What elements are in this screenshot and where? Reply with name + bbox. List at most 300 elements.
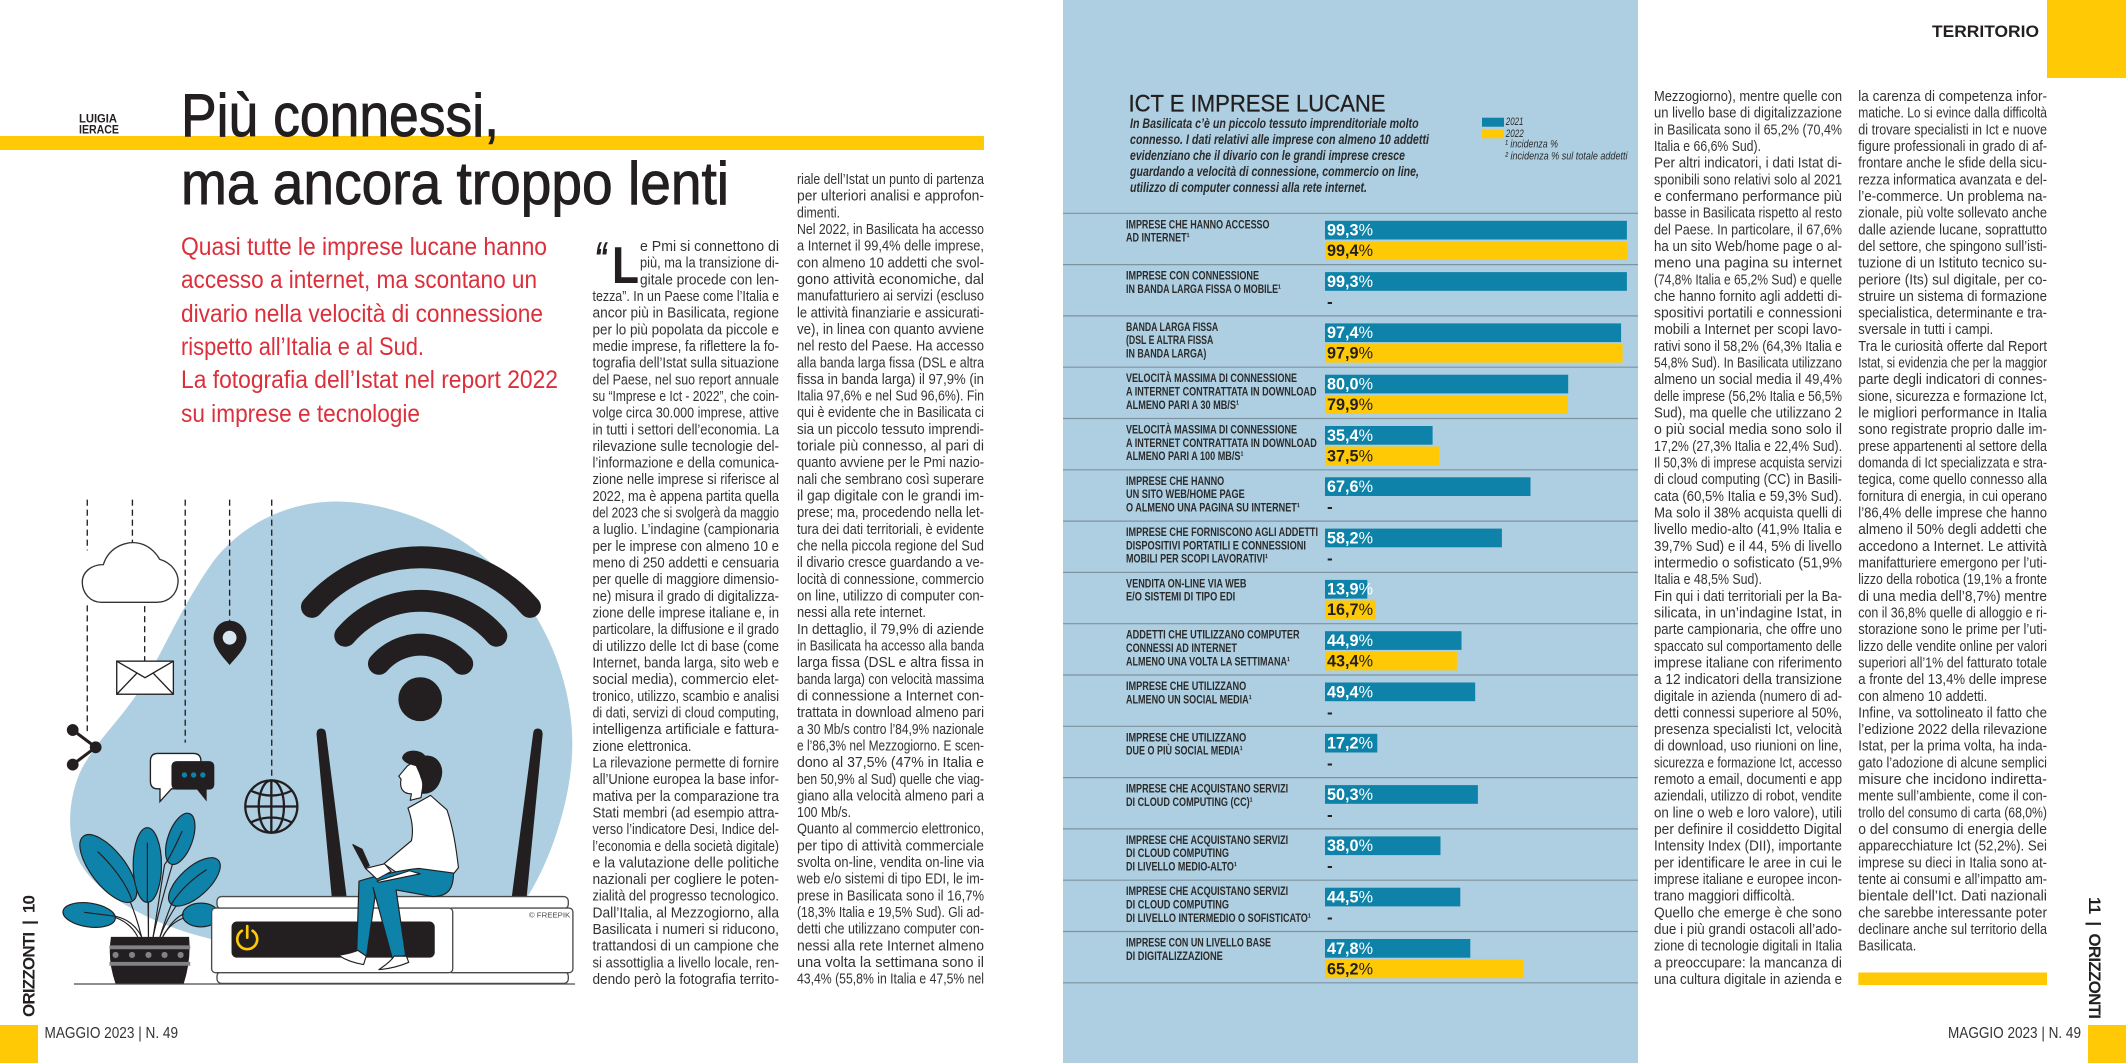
row: cloud computing: DI CLOUD COMPUTING (CC)¹ bbox=[1126, 795, 1253, 809]
row: velocita 30 mb/s: ALMENO PARI A 30 MB/S¹ bbox=[1126, 398, 1239, 412]
text column 3: spaccato sul comportamento delle bbox=[1654, 639, 1842, 655]
text column 1 bbox=[592, 239, 780, 988]
text column 4: rezza informatica avanzata e del- bbox=[1858, 172, 2047, 188]
text column 3: parte campionaria, che offre uno bbox=[1654, 622, 1842, 638]
row: cloud computing: 50,3% bbox=[1327, 785, 1373, 804]
row: cloud intermedio o sofisticato bbox=[1126, 884, 1460, 927]
text column 2: web e/o sistemi di tipo EDI, le im- bbox=[796, 872, 984, 888]
ground line bbox=[74, 983, 575, 985]
text column 2: per ulteriori analisi e approfon- bbox=[797, 189, 984, 205]
row: banda larga fissa: (DSL E ALTRA FISSA bbox=[1126, 333, 1214, 347]
icon: share bbox=[67, 724, 101, 770]
text column 1: e la valutazione delle politiche bbox=[592, 855, 779, 871]
text column 2: sia un piccolo tessuto imprendi- bbox=[797, 422, 984, 438]
row: livello base di digitalizzazione: 47,8% bbox=[1327, 939, 1373, 958]
text column 2: trattata in download almeno pari bbox=[797, 705, 984, 721]
text column 1: del Paese, nel suo report annuale bbox=[592, 372, 779, 388]
text column 4: zionale, più volte sollevato anche bbox=[1858, 206, 2047, 222]
row: addetti con computer: ALMENO UNA VOLTA LA SETTIMANA¹ bbox=[1126, 654, 1290, 668]
red subtitle bbox=[181, 233, 558, 428]
text column 2: le attività finanziarie e assicurati- bbox=[797, 305, 984, 321]
text column 2: dimenti. bbox=[797, 205, 840, 221]
row: velocita 30 mb/s: 80,0% bbox=[1327, 374, 1373, 394]
text column 1: ne) misura il grado di digitalizza- bbox=[592, 589, 779, 605]
row: banda larga fissa: BANDA LARGA FISSA bbox=[1126, 320, 1218, 334]
text column 3: (74,8% Italia e 65,2% Sud) e quelle bbox=[1654, 272, 1842, 288]
text column 4: tegica, come quello connesso alla bbox=[1858, 472, 2048, 488]
row: banda larga fissa: 97,9% bbox=[1327, 344, 1373, 363]
row: sito web: IMPRESE CHE HANNO bbox=[1126, 474, 1224, 488]
text column 4: almeno il 50% degli addetti che bbox=[1858, 522, 2047, 538]
legend: ¹ incidenza % bbox=[1505, 139, 1558, 151]
text column 1: intelligenza artificiale e fattura- bbox=[592, 722, 779, 738]
row: vendita on-line: E/O SISTEMI DI TIPO EDI bbox=[1126, 590, 1235, 604]
text column 1: di utilizzo delle Ict di base (come bbox=[592, 639, 779, 655]
text column 4: Tra le curiosità offerte dal Report bbox=[1858, 339, 2047, 355]
left issue line: MAGGIO 2023 | N. 49 bbox=[44, 1025, 178, 1042]
text column 3: Per altri indicatori, i dati Istat di- bbox=[1654, 156, 1842, 172]
drop cap: “ bbox=[594, 233, 608, 282]
text column 2: dono al 37,5% (47% in Italia e bbox=[797, 755, 984, 771]
text column 4: tente ai consumi e all’impatto am- bbox=[1858, 872, 2047, 888]
row: sito web bbox=[1126, 474, 1530, 517]
text column 2: larga fissa (DSL e altra fissa in bbox=[797, 655, 984, 671]
text column 3: detti connessi superiore al 50%, bbox=[1654, 705, 1842, 721]
text column 3: intermedio o sofisticato (51,9% bbox=[1654, 556, 1842, 572]
text column 3: rativi sono il 58,2% (64,3% Italia e bbox=[1654, 339, 1842, 355]
text column 4: bientale dell’Ict. Dati nazionali bbox=[1858, 889, 2047, 905]
text column 2: nel resto del Paese. Ha accesso bbox=[797, 339, 984, 355]
text column 1: La rilevazione permette di fornire bbox=[592, 756, 779, 772]
text column 4: l’86,4% delle imprese che hanno bbox=[1858, 506, 2047, 522]
text column 3: Italia e 48,5% Sud). bbox=[1654, 572, 1762, 588]
icon: wifi bbox=[312, 557, 530, 710]
row: un social media bbox=[1126, 679, 1475, 722]
row: un social media: IMPRESE CHE UTILIZZANO bbox=[1126, 679, 1246, 693]
text column 1: si assottiglia a livello locale, ren- bbox=[592, 955, 779, 971]
row: due social media: IMPRESE CHE UTILIZZANO bbox=[1126, 730, 1246, 744]
text column 3: imprese italiane e europee incon- bbox=[1654, 872, 1842, 888]
row: velocita 100 mb/s bbox=[1126, 422, 1439, 465]
text column 2: banda larga) con velocità massima bbox=[797, 672, 985, 688]
text column 4: di una media dell’8,7%) mentre bbox=[1858, 589, 2047, 605]
text column 4: Istat, per la prima volta, ha inda- bbox=[1858, 739, 2047, 755]
text column 3: delle imprese (56,2% Italia e 56,5% bbox=[1654, 389, 1842, 405]
row: vendita on-line: 16,7% bbox=[1327, 600, 1373, 619]
text column 3: digitale in azienda (numero di ad- bbox=[1654, 689, 1842, 705]
text column 1: verso l’indicatore Desi, Indice del- bbox=[592, 822, 779, 838]
text column 1: meno di 250 addetti e censuaria bbox=[592, 556, 780, 572]
text column 3: di cloud computing (CC) in Basili- bbox=[1654, 472, 1842, 488]
text column 1: dendo però la fotografia territo- bbox=[592, 972, 779, 988]
text column 3: on line o web e loro valore), utili bbox=[1654, 805, 1842, 821]
row: sito web: UN SITO WEB/HOME PAGE bbox=[1126, 487, 1245, 501]
text column 1: zialità del progresso tecnologico. bbox=[592, 889, 779, 905]
text column 3: e confermano performance più bbox=[1654, 189, 1842, 205]
row: livello base di digitalizzazione bbox=[1126, 936, 1523, 978]
text column 2: prese in Basilicata sono il 16,7% bbox=[797, 888, 984, 904]
text column 2: manufatturiero ai servizi (escluso bbox=[797, 289, 984, 305]
text column 1: su “Imprese e Ict - 2022”, che coin- bbox=[592, 389, 779, 405]
row: addetti con computer: CONNESSI AD INTERNET bbox=[1126, 641, 1237, 655]
text column 4: sono registrate proprio dalle im- bbox=[1858, 422, 2047, 438]
text column 3: Sud), ma quelle che utilizzano 2 bbox=[1654, 406, 1842, 422]
section heading: TERRITORIO bbox=[1932, 22, 2039, 41]
icon: cloud bbox=[82, 543, 178, 602]
text column 4: storazione sono le prime per l’uti- bbox=[1858, 622, 2047, 638]
text column 2: di connessione a Internet con- bbox=[797, 688, 984, 704]
row: banda larga fissa bbox=[1126, 320, 1623, 363]
legend: 2021 bbox=[1505, 116, 1523, 128]
text column 2: con almeno 10 addetti che svol- bbox=[797, 255, 984, 271]
row: livello base di digitalizzazione: DI DIGITALIZZAZIONE bbox=[1126, 949, 1223, 963]
text column 1: l’informazione e della comunica- bbox=[592, 456, 779, 472]
legend bbox=[1482, 116, 1628, 163]
text column 4: sversale in tutti i campi. bbox=[1858, 322, 1993, 338]
text column 3: aziendali, utilizzo di robot, vendite bbox=[1654, 789, 1842, 805]
text column 2: il divario cresce guardando a ve- bbox=[797, 555, 984, 571]
text column 2: a 30 Mb/s contro l’84,9% nazionale bbox=[797, 722, 984, 738]
text column 4: con il 36,8% quelle di alloggio e ri- bbox=[1858, 606, 2047, 622]
text column 2: fissa in banda larga) il 97,9% (in bbox=[797, 372, 984, 388]
row: un social media: 49,4% bbox=[1327, 682, 1373, 701]
text column 2: locità di connessione, commercio bbox=[797, 572, 984, 588]
text column 3: sponibili sono relativi solo al 2021 bbox=[1654, 172, 1842, 188]
text column 4: Istat, si evidenzia che per la maggior bbox=[1858, 356, 2047, 372]
text column 3: presenza specialisti Ict, velocità bbox=[1654, 722, 1843, 738]
text column 2: svolta on-line, vendita on-line via bbox=[797, 855, 985, 871]
text column 2: prese; ma, procedendo nella let- bbox=[797, 505, 984, 521]
icon: globe bbox=[245, 780, 297, 833]
text column 3: Il 50,3% di imprese acquista servizi bbox=[1654, 456, 1842, 472]
text column 3: imprese italiane con riferimento bbox=[1654, 655, 1842, 671]
text column 1: per quelle di maggiore dimensio- bbox=[592, 572, 779, 588]
row: accesso ad internet bbox=[1126, 217, 1627, 260]
text column 3: almeno un social media il 49,4% bbox=[1654, 372, 1842, 388]
row: sito web: O ALMENO UNA PAGINA SU INTERNET¹ bbox=[1126, 500, 1300, 514]
legend: 2022 bbox=[1505, 128, 1524, 140]
row: livello base di digitalizzazione: IMPRESE CON UN LIVELLO BASE bbox=[1126, 936, 1271, 950]
row: velocita 100 mb/s: VELOCITÀ MASSIMA DI CONNESSIONE bbox=[1126, 422, 1297, 436]
red subtitle: La fotografia dell’Istat nel report 2022 bbox=[181, 366, 558, 394]
text column 2: nessi alla rete Internet almeno bbox=[797, 938, 984, 954]
text column 3: un livello base di digitalizzazione bbox=[1654, 106, 1842, 122]
row: cloud intermedio o sofisticato: 44,5% bbox=[1327, 888, 1373, 906]
row: cloud medio-alto: 38,0% bbox=[1327, 836, 1373, 855]
row: cloud intermedio o sofisticato: DI LIVELLO INTERMEDIO O SOFISTICATO¹ bbox=[1126, 911, 1311, 925]
row: velocita 100 mb/s: ALMENO PARI A 100 MB/S¹ bbox=[1126, 449, 1244, 463]
row: velocita 100 mb/s: 35,4% bbox=[1327, 426, 1373, 445]
router antennas bbox=[316, 728, 543, 898]
text column 4: Infine, va sottolineato il fatto che bbox=[1858, 705, 2047, 721]
text column 2: ben 50,9% al Sud) quelle che viag- bbox=[797, 772, 984, 788]
text column 3: che hanno fornito agli addetti di- bbox=[1654, 289, 1842, 305]
text column 1: tezza”. In un Paese come l’Italia e bbox=[592, 289, 779, 305]
text column 4: sione, sicurezza e formazione Ict, bbox=[1858, 389, 2047, 405]
illustration: dashed lines bbox=[87, 500, 272, 779]
title: Più connessi, bbox=[181, 82, 499, 149]
red subtitle: accesso a internet, ma scontano un bbox=[181, 266, 537, 294]
text column 4: tuzione di un Istituto tecnico su- bbox=[1858, 256, 2047, 272]
row: dispositivi portatili bbox=[1126, 525, 1502, 568]
text column 1: Basilicata i numeri si riducono, bbox=[592, 922, 779, 938]
text column 3: del Paese. In particolare, il 67,6% bbox=[1654, 222, 1842, 238]
chart intro bbox=[1129, 116, 1429, 195]
text column 1: l’economia e della società digitale) bbox=[592, 839, 779, 855]
red subtitle: divario nella velocità di connessione bbox=[181, 300, 543, 328]
row: sito web: - bbox=[1327, 498, 1333, 517]
text column 3: mobili a Internet per scopi lavo- bbox=[1654, 322, 1842, 338]
top right square bbox=[2047, 0, 2126, 78]
text column 2: qui è evidente che in Basilicata ci bbox=[797, 405, 984, 421]
text column 2: nessi alla rete internet. bbox=[797, 605, 926, 621]
text column 3: silicata, in un’indagine Istat, in bbox=[1654, 606, 1842, 622]
text column 4: con almeno 10 addetti. bbox=[1858, 689, 1987, 705]
text column 1: volge circa 30.000 imprese, attive bbox=[592, 406, 779, 422]
text column 3: di download, uso riunioni on line, bbox=[1654, 739, 1842, 755]
text column 2: tura dei dati territoriali, è evidente bbox=[797, 522, 984, 538]
text column 1: zione nelle imprese si riferisce al bbox=[592, 472, 779, 488]
text column 1: 2022, ma è appena partita quella bbox=[592, 489, 780, 505]
byline bbox=[79, 112, 119, 136]
text column 3: Ma solo il 38% acquista quelli di bbox=[1654, 506, 1842, 522]
text column 4: lizzo della robotica (19,1% a fronte bbox=[1858, 572, 2047, 588]
row: banda larga fissa o mobile: IN BANDA LARGA FISSA O MOBILE¹ bbox=[1126, 282, 1281, 296]
row: velocita 30 mb/s bbox=[1126, 370, 1568, 414]
text column 1: tronico, utilizzo, scambio e analisi bbox=[592, 689, 779, 705]
text column 3: zione di tecnologie digitali in Italia bbox=[1654, 939, 1843, 955]
row: addetti con computer: 44,9% bbox=[1327, 631, 1373, 650]
text column 1: per lo più popolata da piccole e bbox=[592, 322, 779, 338]
text column 4: parte degli indicatori di connes- bbox=[1858, 372, 2047, 388]
text column 2: 43,4% (55,8% in Italia e 47,5% nel bbox=[797, 972, 984, 988]
row: cloud intermedio o sofisticato: DI CLOUD COMPUTING bbox=[1126, 898, 1229, 912]
yellow end bar bbox=[1858, 972, 2047, 985]
text column 4: apparecchiature Ict (52,2%). Sei bbox=[1858, 839, 2047, 855]
text column 3: Intensity Index (DII), importante bbox=[1654, 839, 1842, 855]
row: dispositivi portatili: 58,2% bbox=[1327, 528, 1373, 547]
router body bbox=[212, 897, 573, 983]
text column 4: trollo del consumo di carta (68,0%) bbox=[1858, 805, 2047, 821]
text column 3: 39,7% Sud) e il 44, 5% di livello bbox=[1654, 539, 1842, 555]
text column 4: le migliori performance in Italia bbox=[1858, 406, 2048, 422]
text column 3: basse in Basilicata rispetto al resto bbox=[1654, 206, 1842, 222]
text column 2: giano alla velocità almeno pari a bbox=[797, 788, 985, 804]
row: cloud computing bbox=[1126, 782, 1478, 824]
row: banda larga fissa: IN BANDA LARGA) bbox=[1126, 346, 1206, 360]
text column 4: o del consumo di energia delle bbox=[1858, 822, 2047, 838]
row: cloud computing: IMPRESE CHE ACQUISTANO SERVIZI bbox=[1126, 782, 1288, 796]
text column 1: ancor più in Basilicata, regione bbox=[592, 306, 779, 322]
text column 2 bbox=[796, 172, 985, 988]
text column 4: che sarebbe interessante poter bbox=[1858, 905, 2047, 921]
text column 4: imprese su dieci in Italia sono at- bbox=[1858, 855, 2047, 871]
row: addetti con computer: ADDETTI CHE UTILIZZANO COMPUTER bbox=[1126, 628, 1300, 642]
text column 3: in Basilicata sono il 65,2% (70,4% bbox=[1654, 122, 1842, 138]
text column 1: zione delle imprese italiane e, in bbox=[592, 606, 779, 622]
row: banda larga fissa: 97,4% bbox=[1327, 323, 1373, 342]
row: due social media: - bbox=[1327, 754, 1333, 773]
text column 1: più, ma la transizione di- bbox=[640, 256, 779, 272]
row: velocita 30 mb/s: A INTERNET CONTRATTATA IN DOWNLOAD bbox=[1126, 384, 1317, 398]
text column 1: rilevazione sulle tecnologie del- bbox=[592, 439, 779, 455]
text column 1: medie imprese, fa riflettere la fo- bbox=[592, 339, 779, 355]
chart intro: evidenziano che il divario con le grandi imprese cresce bbox=[1130, 148, 1405, 163]
row: banda larga fissa o mobile: 99,3% bbox=[1327, 272, 1373, 291]
red subtitle: rispetto all’Italia e al Sud. bbox=[181, 333, 424, 361]
right corner square bbox=[2088, 1025, 2126, 1063]
text column 2: gono attività economiche, dal bbox=[797, 272, 984, 288]
text column 3: a 12 indicatori della transizione bbox=[1654, 672, 1842, 688]
plant pot bbox=[109, 937, 190, 984]
text column 1: e Pmi si connettono di bbox=[640, 239, 779, 255]
text column 4: fornitura di energia, in cui operano bbox=[1858, 489, 2047, 505]
text column 1: trattandosi di un campione che bbox=[592, 939, 779, 955]
row: vendita on-line bbox=[1126, 576, 1376, 619]
row: dispositivi portatili: IMPRESE CHE FORNISCONO AGLI ADDETTI bbox=[1126, 525, 1318, 539]
drop cap bbox=[594, 233, 639, 295]
text column 2: ve), in linea con quanto avviene bbox=[797, 322, 984, 338]
text column 4: prese appartenenti al settore della bbox=[1858, 439, 2048, 455]
left corner square bbox=[0, 1025, 38, 1063]
row: cloud medio-alto: DI LIVELLO MEDIO-ALTO¹ bbox=[1126, 860, 1237, 874]
title bbox=[181, 82, 729, 217]
text column 1: Dall’Italia, al Mezzogiorno, alla bbox=[592, 905, 780, 921]
text column 1: Stati membri (ad esempio attra- bbox=[592, 805, 779, 821]
yellow heading band bbox=[0, 136, 984, 150]
row: cloud intermedio o sofisticato: - bbox=[1327, 908, 1333, 927]
row: banda larga fissa o mobile bbox=[1126, 269, 1627, 311]
text column 3: spositivi portatili e connessioni bbox=[1654, 306, 1842, 322]
right issue line: MAGGIO 2023 | N. 49 bbox=[1948, 1025, 2081, 1042]
row: velocita 100 mb/s: 37,5% bbox=[1327, 446, 1373, 465]
icon: power button bbox=[237, 926, 257, 949]
row: due social media: DUE O PIÙ SOCIAL MEDIA¹ bbox=[1126, 743, 1243, 758]
text column 2: detti che utilizzano computer con- bbox=[797, 922, 984, 938]
text column 3: remoto a email, documenti e app bbox=[1654, 772, 1842, 788]
text column 4: figure professionali in grado di af- bbox=[1858, 139, 2047, 155]
text column 3: per identificare le aree in cui le bbox=[1654, 855, 1842, 871]
text column 4: dalle aziende lucane, soprattutto bbox=[1858, 222, 2047, 238]
text column 3: cata (60,5% Italia e 59,3% Sud). bbox=[1654, 489, 1842, 505]
text column 4: manifatturiere emergono per l’uti- bbox=[1858, 556, 2047, 572]
right folio: page and section: 11 | ORIZZONTI bbox=[2085, 897, 2104, 1019]
text column 2: alla banda larga fissa (DSL e altra bbox=[797, 355, 985, 371]
text column 4: la carenza di competenza infor- bbox=[1858, 89, 2047, 105]
text column 4: matiche. Lo si evince dalla difficoltà bbox=[1858, 106, 2048, 122]
icon: chat bubbles bbox=[150, 753, 214, 802]
text column 3: Fin qui i dati territoriali per la Ba- bbox=[1654, 589, 1842, 605]
text column 4: misure che incidono indiretta- bbox=[1858, 772, 2047, 788]
row: dispositivi portatili: MOBILI PER SCOPI LAVORATIVI¹ bbox=[1126, 552, 1268, 566]
row: accesso ad internet: 99,4% bbox=[1327, 241, 1373, 260]
chart intro: In Basilicata c’è un piccolo tessuto imprenditoriale molto bbox=[1130, 116, 1419, 131]
text column 3: trano maggiori difficoltà. bbox=[1654, 889, 1795, 905]
text column 1: di dati, servizi di cloud computing, bbox=[592, 706, 779, 722]
row: due social media bbox=[1126, 730, 1377, 773]
text column 2: (18,3% Italia e 19,5% Sud). Gli ad- bbox=[797, 905, 984, 921]
row: addetti con computer bbox=[1126, 628, 1462, 670]
row: velocita 30 mb/s: 79,9% bbox=[1327, 395, 1373, 414]
text column 3: per definire il cosiddetto Digital bbox=[1654, 822, 1842, 838]
text column 1: in tutti i settori dell’economia. La bbox=[592, 422, 780, 438]
row: due social media: 17,2% bbox=[1327, 734, 1373, 753]
text column 3: 17,2% (27,3% Italia e 22,4% Sud). bbox=[1654, 439, 1842, 455]
text column 3: livello medio-alto (41,9% Italia e bbox=[1654, 522, 1842, 538]
illustration bbox=[61, 500, 573, 984]
row: vendita on-line: 13,9% bbox=[1327, 580, 1373, 599]
row: cloud medio-alto bbox=[1126, 833, 1440, 876]
row: sito web: 67,6% bbox=[1327, 477, 1373, 496]
panel: infographic background bbox=[1063, 0, 1638, 1063]
text column 3 bbox=[1654, 89, 1843, 988]
text column 4: periore (Its) sul digitale, per co- bbox=[1858, 272, 2047, 288]
text column 4: declinare anche sul territorio della bbox=[1858, 922, 2048, 938]
text column 4 bbox=[1858, 89, 2048, 955]
row: cloud medio-alto: - bbox=[1327, 857, 1333, 876]
row: dispositivi portatili: - bbox=[1327, 549, 1333, 568]
icon: envelope bbox=[117, 661, 173, 694]
text column 4: superiori all’1% del fatturato totale bbox=[1858, 655, 2047, 671]
text column 2: Quanto al commercio elettronico, bbox=[797, 822, 984, 838]
text column 2: il gap digitale con le grandi im- bbox=[797, 488, 984, 504]
text column 2: per tipo di attività commerciale bbox=[797, 838, 984, 854]
row: accesso ad internet: AD INTERNET¹ bbox=[1126, 231, 1190, 245]
text column 1: all’Unione europea la base infor- bbox=[592, 772, 779, 788]
text column 1: social media), commercio elet- bbox=[592, 672, 779, 688]
drop cap: L bbox=[612, 237, 639, 295]
text column 2: nali che sembrano così superare bbox=[797, 472, 984, 488]
red subtitle: Quasi tutte le imprese lucane hanno bbox=[181, 233, 547, 261]
text column 2: 100 Mb/s. bbox=[797, 805, 851, 821]
text column 2: riale dell’Istat un punto di partenza bbox=[797, 172, 985, 188]
illustration: blue blob bbox=[70, 502, 572, 960]
text column 4: struire un sistema di formazione bbox=[1858, 289, 2047, 305]
text column 4: specialistica, determinante e tra- bbox=[1858, 306, 2047, 322]
text column 2: toriale più connesso, al pari di bbox=[797, 439, 984, 455]
text column 4: l’edizione 2022 della rilevazione bbox=[1858, 722, 2047, 738]
text column 3: due i più grandi ostacoli all’ado- bbox=[1654, 922, 1842, 938]
row: accesso ad internet: 99,3% bbox=[1327, 221, 1373, 240]
text column 2: on line, utilizzo di computer con- bbox=[797, 588, 984, 604]
text column 2: quanto avviene per le Pmi nazio- bbox=[797, 455, 984, 471]
text column 3: Italia e 66,6% Sud). bbox=[1654, 139, 1761, 155]
text column 4: l’e-commerce. Un problema na- bbox=[1858, 189, 2047, 205]
row: dispositivi portatili: DISPOSITIVI PORTATILI E CONNESSIONI bbox=[1126, 538, 1306, 552]
chart intro: connesso. I dati relativi alle imprese con almeno 10 addetti bbox=[1130, 132, 1429, 147]
text column 3: ha un sito Web/home page o al- bbox=[1654, 239, 1842, 255]
row: livello base di digitalizzazione: 65,2% bbox=[1327, 959, 1373, 978]
text column 2: e l’86,3% nel Mezzogiorno. E scen- bbox=[797, 738, 984, 754]
text column 4: Basilicata. bbox=[1858, 939, 1916, 955]
text column 1: per le imprese con almeno 10 e bbox=[592, 539, 779, 555]
text column 3: Quello che emerge è che sono bbox=[1654, 905, 1842, 921]
text column 4: gato l’adozione di alcune semplici bbox=[1858, 755, 2047, 771]
text column 1: particolare, la diffusione e il grado bbox=[592, 622, 779, 638]
text column 1: tografia dell’Istat sulla situazione bbox=[592, 356, 779, 372]
person bbox=[339, 751, 458, 970]
text column 4: frontare anche le sfide della sicu- bbox=[1858, 156, 2047, 172]
byline: IERACE bbox=[79, 122, 119, 136]
red subtitle: su imprese e tecnologie bbox=[181, 400, 420, 428]
text column 1: mativa per la comparazione tra bbox=[592, 789, 780, 805]
chart intro: guardando a velocità di connessione, commercio on line, bbox=[1129, 164, 1419, 179]
text column 2: una volta la settimana sono il bbox=[797, 955, 984, 971]
credit: © FREEPIK bbox=[529, 911, 571, 920]
text column 4: accedono a Internet. Le attività bbox=[1858, 539, 2048, 555]
text column 4: domanda di Ict specializzata e stra- bbox=[1858, 456, 2047, 472]
text column 4: lizzo delle vendite online per valori bbox=[1858, 639, 2047, 655]
